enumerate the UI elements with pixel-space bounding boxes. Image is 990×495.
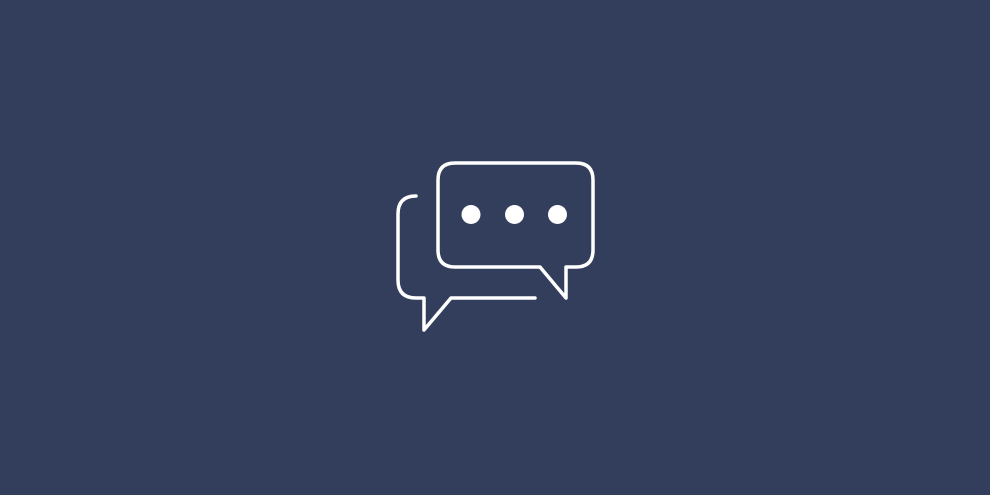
- icon: back speech bubble: [398, 196, 535, 330]
- icon: front speech bubble: [438, 163, 593, 298]
- icon: dots: [462, 205, 567, 224]
